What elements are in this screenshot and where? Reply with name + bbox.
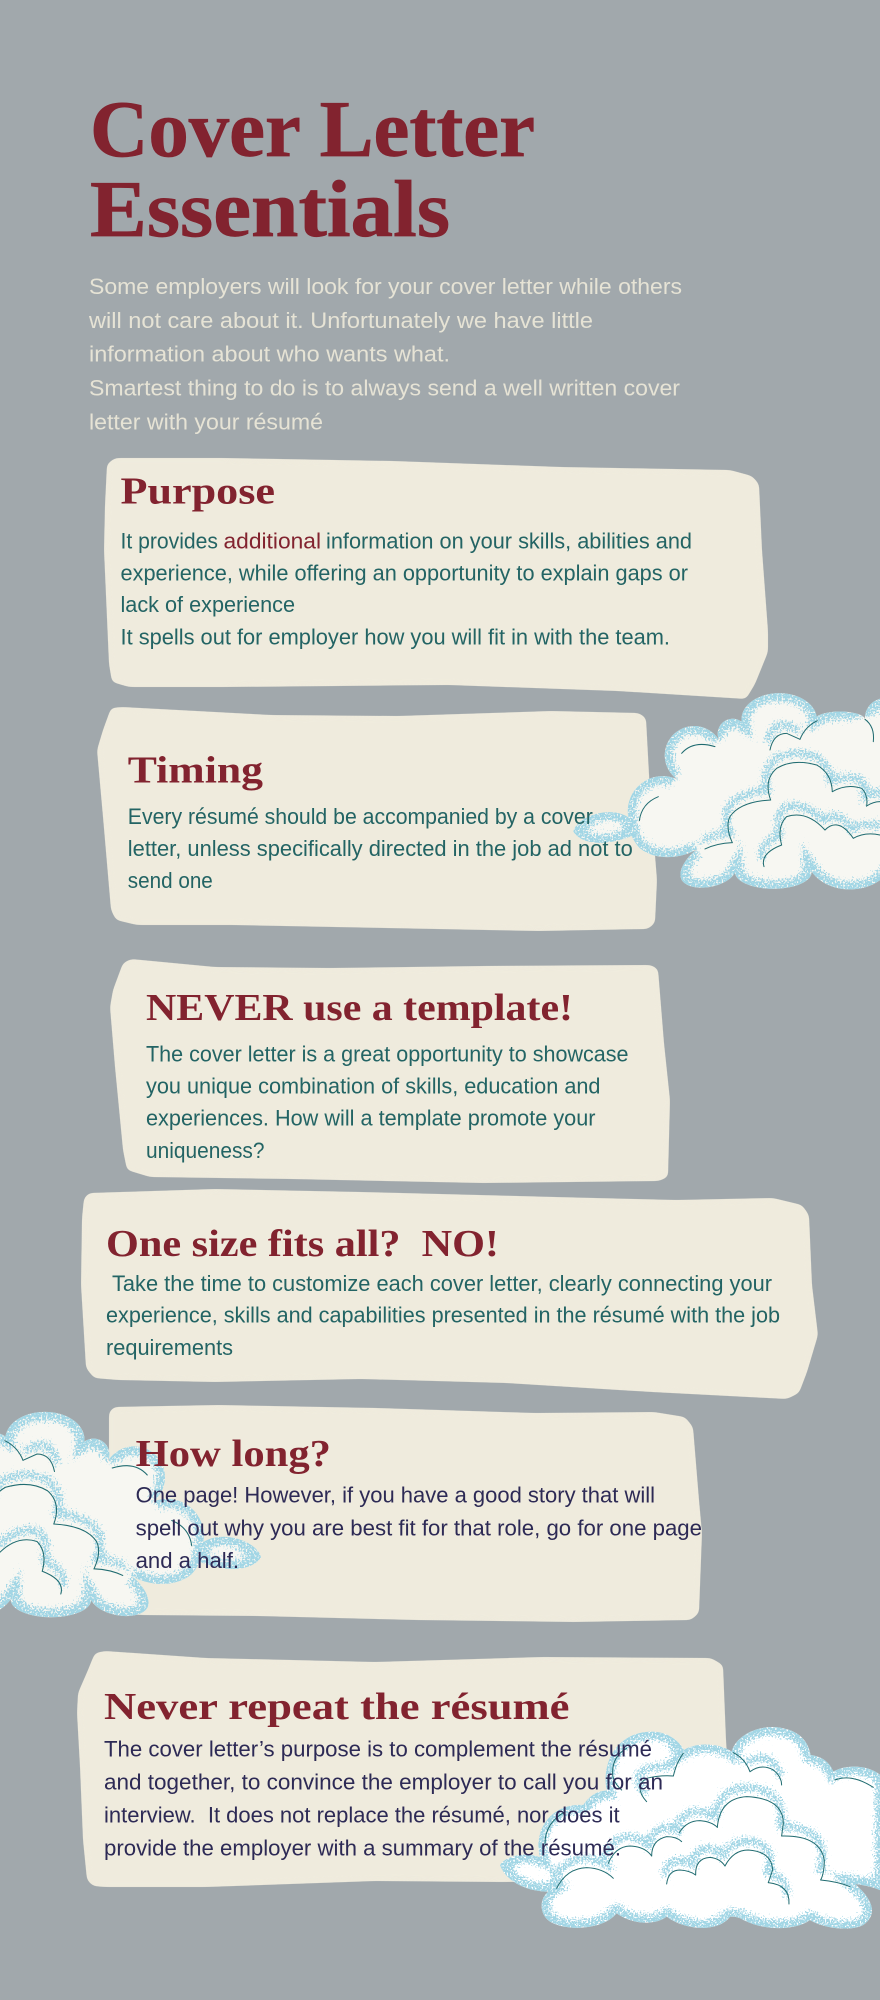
panel: purpose: experience, while offering an opportunity to explain gaps or (120, 560, 688, 585)
intro text block: information about who wants what. (89, 342, 450, 367)
title (90, 86, 535, 254)
panel: never use a template: you unique combination of skills, education and (146, 1074, 600, 1099)
panel: never use a template: experiences. How will a template promote your (146, 1106, 596, 1131)
intro text block (88, 274, 682, 434)
text: how long: How long? (136, 1433, 331, 1475)
text: never repeat the resume: interview. It does not replace the résumé, nor does it (104, 1803, 620, 1828)
panel: purpose: It provides (120, 529, 218, 554)
text: timing: Timing (128, 750, 263, 792)
title: Cover Letter (90, 86, 535, 174)
icon: cloud bottom right (500, 1727, 880, 1929)
panel: one size fits all: experience, skills and capabilities presented in the résumé with the job (106, 1303, 780, 1328)
intro text block: Some employers will look for your cover letter while others (89, 274, 682, 299)
panel: never repeat the resume (77, 1651, 730, 1887)
panel: purpose: information on your skills, abilities and (326, 529, 692, 554)
panel: one size fits all (81, 1189, 818, 1399)
panel: one size fits all: One size fits all? NO! (106, 1223, 499, 1265)
text: timing: Every résumé should be accompanied by a cover (128, 804, 593, 829)
panel: how long (109, 1405, 702, 1622)
panel: one size fits all: Take the time to customize each cover letter, clearly connecting your (112, 1271, 772, 1296)
text: never repeat the resume: Never repeat the résumé (104, 1686, 570, 1728)
panel: purpose: Purpose (120, 471, 275, 513)
text: how long: and a half. (136, 1548, 239, 1573)
intro text block: Smartest thing to do is to always send a well written cover (89, 376, 680, 400)
icon: cloud left (0, 1412, 261, 1618)
text: timing: send one (128, 868, 213, 893)
icon: cloud top right (573, 693, 880, 889)
intro text block: will not care about it. Unfortunately we have little (88, 308, 593, 333)
panel: one size fits all: requirements (106, 1335, 233, 1360)
panel: purpose: It spells out for employer how you will fit in with the team. (120, 624, 670, 650)
panel: never use a template (110, 959, 670, 1183)
text: how long: One page! However, if you have a good story that will (136, 1483, 655, 1508)
panel: never use a template: The cover letter is a great opportunity to showcase (146, 1042, 628, 1067)
text: how long: spell out why you are best fit for that role, go for one page (136, 1516, 702, 1541)
panel: never use a template: uniqueness? (146, 1138, 264, 1163)
text: never repeat the resume (104, 1686, 663, 1861)
panel: purpose: additional (224, 529, 321, 554)
text: never repeat the resume: The cover letter’s purpose is to complement the résumé (104, 1737, 652, 1762)
text: how long (136, 1433, 702, 1573)
text: timing: letter, unless specifically directed in the job ad not to (128, 836, 633, 861)
intro text block: letter with your résumé (89, 409, 323, 434)
panel: timing (97, 707, 657, 931)
title: Essentials (90, 166, 450, 254)
text: never repeat the resume: provide the employer with a summary of the résumé. (104, 1836, 621, 1861)
text: never repeat the resume: and together, to convince the employer to call you for an (104, 1770, 663, 1795)
panel: purpose (104, 458, 768, 699)
text: timing (128, 750, 633, 893)
panel: never use a template: NEVER use a template! (146, 987, 573, 1029)
panel: purpose: lack of experience (120, 592, 295, 617)
